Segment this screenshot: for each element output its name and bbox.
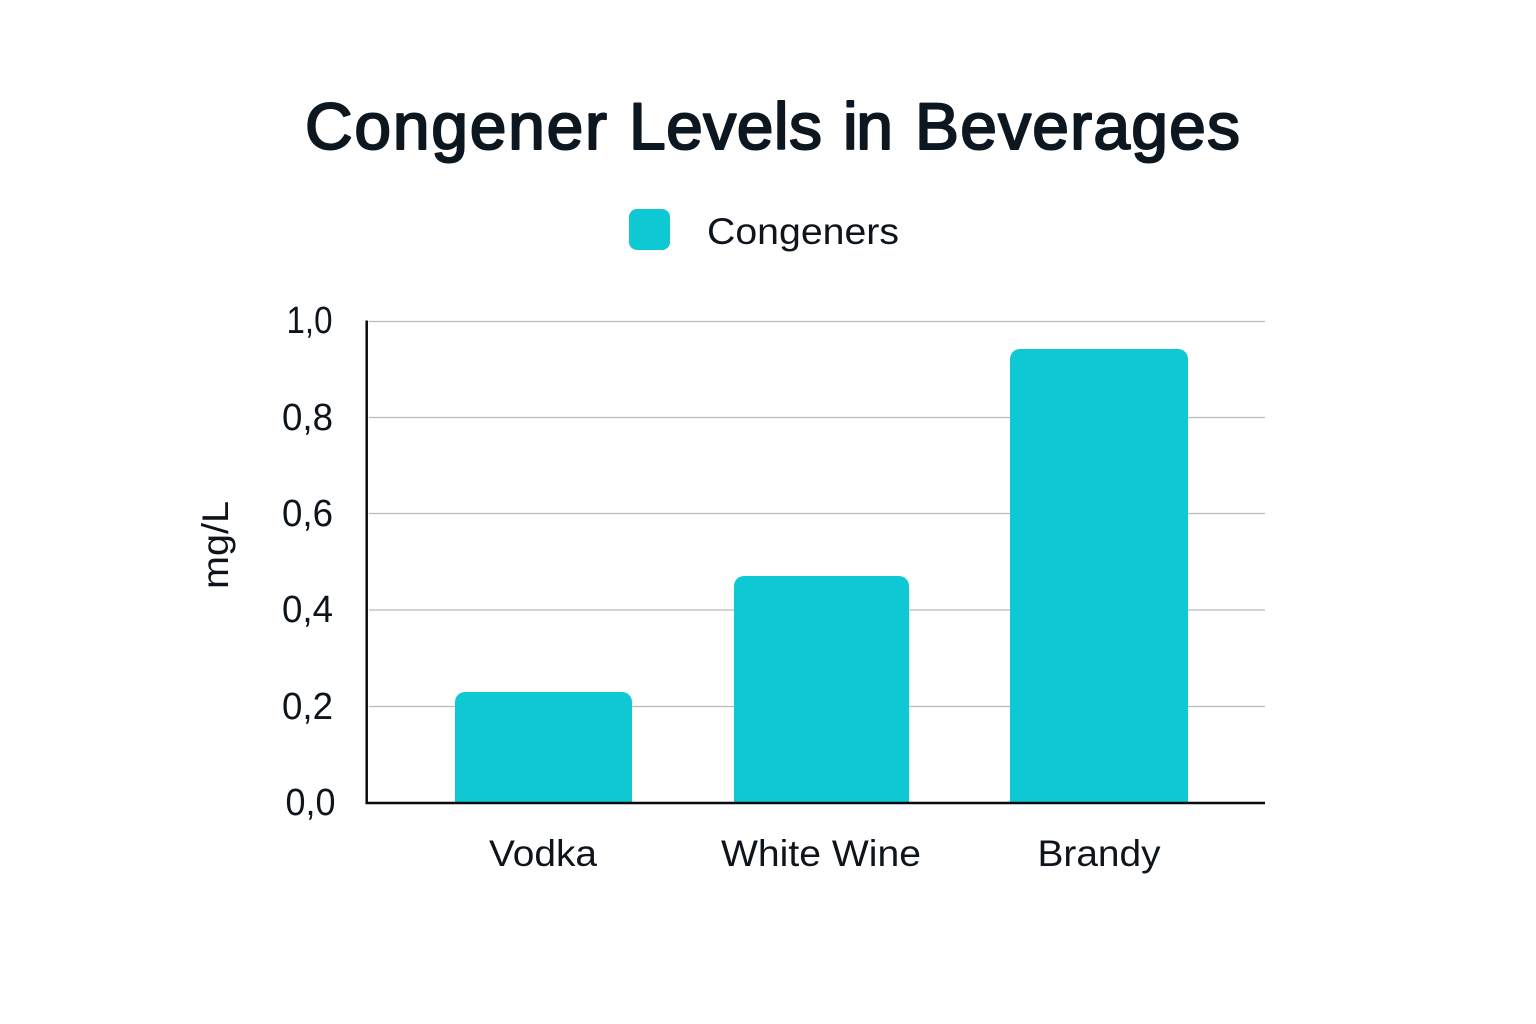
bar: White Wine [734, 576, 909, 803]
y-axis tick labels: 1,0 [286, 300, 332, 342]
x-axis category labels: Brandy [1038, 833, 1161, 874]
bar chart bars [455, 349, 1188, 803]
title: in [843, 89, 893, 163]
x-axis category labels [489, 833, 1161, 874]
legend [629, 209, 899, 252]
y-axis tick labels: 0,8 [282, 397, 333, 439]
bar: Vodka [455, 692, 632, 803]
legend label: Congeners [707, 211, 899, 252]
y-axis tick labels: 0,0 [286, 782, 336, 824]
x-axis category labels: Vodka [489, 833, 597, 874]
x-axis category labels: White Wine [721, 833, 921, 874]
title [305, 89, 1240, 163]
title: Beverages [915, 89, 1240, 163]
y-axis tick labels [282, 300, 336, 824]
y-axis title: mg/L [195, 501, 236, 589]
y-axis tick labels: 0,2 [282, 686, 333, 728]
title: Levels [629, 89, 822, 163]
title: Congener [305, 89, 607, 163]
y-axis tick labels: 0,4 [282, 589, 333, 631]
legend swatch [629, 209, 670, 250]
bar: Brandy [1010, 349, 1188, 803]
chart axes [367, 320, 1265, 803]
y-axis tick labels: 0,6 [282, 493, 333, 535]
